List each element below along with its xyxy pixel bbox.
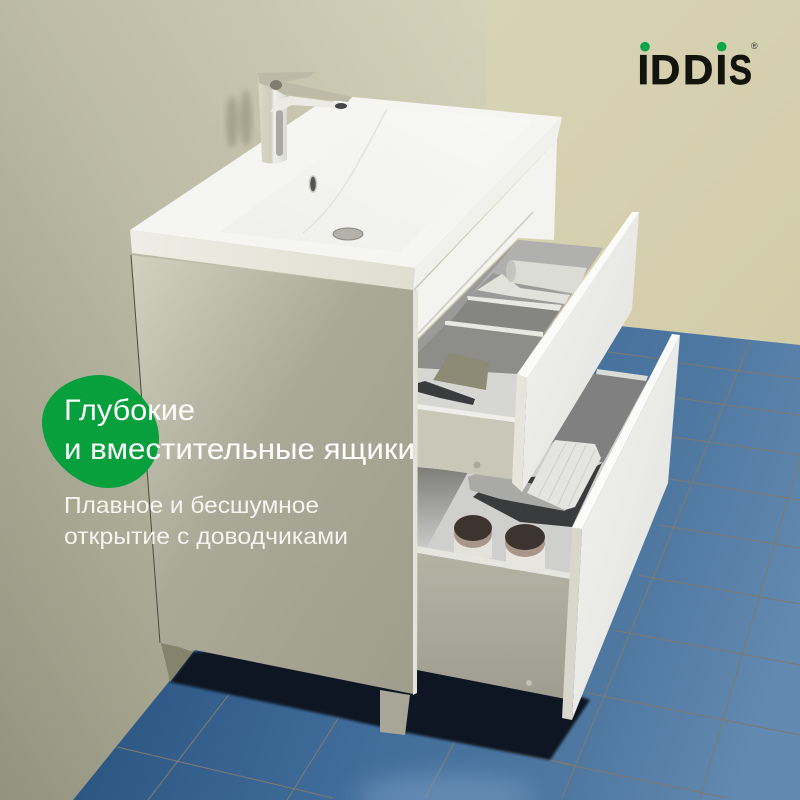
upper drawer: [417, 212, 639, 492]
green blob: [42, 375, 159, 488]
faucet shadow on wall: [226, 90, 252, 148]
divider strip two: [445, 321, 543, 337]
wall return under cabinet: [160, 640, 193, 682]
left wall: [0, 0, 490, 800]
lower drawer base: [417, 373, 648, 579]
cabinet shadow on floor: [170, 640, 590, 760]
white ribbed towel: [527, 440, 601, 510]
floor light patch: [355, 773, 535, 800]
upper drawer rim: [417, 404, 518, 423]
lower drawer top edge: [572, 334, 680, 529]
heading: [64, 394, 415, 466]
logo wordmark: I: [716, 46, 727, 93]
razor handle: [418, 381, 475, 405]
back compartment: [470, 240, 603, 296]
basin top: [130, 97, 562, 268]
overflow hole: [310, 176, 316, 192]
subheading: открытие с доводчиками: [64, 523, 348, 549]
lower drawer rim: [417, 546, 570, 579]
logo wordmark: S: [729, 47, 752, 94]
middle compartment: [450, 300, 559, 333]
heading: и вместительные ящики: [64, 433, 415, 466]
rail strip: [418, 212, 533, 334]
rolled towel: [506, 260, 587, 294]
logo wordmark: [638, 46, 752, 94]
lower drawer grey interior: [515, 373, 648, 490]
upper drawer top edge: [517, 212, 639, 378]
folded paper: [477, 274, 570, 304]
basin front lip: [130, 230, 415, 290]
grey towel: [468, 472, 570, 511]
jar right: [505, 524, 545, 570]
subheading: Плавное и бесшумное: [64, 492, 319, 518]
divider strip one: [467, 296, 562, 311]
rear rim of lower drawer: [596, 369, 648, 381]
heading: Глубокие: [64, 394, 195, 427]
cabinet upper face under basin: [415, 140, 557, 338]
logo wordmark: D: [683, 46, 713, 93]
white towel in drawer: [418, 368, 518, 420]
basin right lip: [413, 117, 562, 290]
lower drawer inner side wall: [417, 467, 468, 547]
lower drawer screw: [526, 680, 532, 686]
aerator: [335, 103, 347, 109]
jar left: [454, 515, 492, 558]
lower drawer front panel: [572, 335, 680, 720]
basin bowl: [220, 109, 533, 252]
cabinet side front edge: [413, 290, 418, 695]
glass bottle: [433, 353, 489, 390]
right wall: [487, 0, 800, 346]
upper drawer base: [418, 240, 603, 374]
lower drawer: [417, 334, 680, 720]
cabinet left edge line: [131, 255, 160, 643]
logo green dots: [640, 42, 726, 52]
drain: [333, 228, 363, 240]
cabinet side panel: [131, 255, 413, 694]
lower drawer side box: [417, 553, 570, 699]
bowl crease: [303, 109, 387, 233]
front compartment: [418, 325, 542, 374]
faucet joint: [270, 80, 282, 90]
faucet spout: [270, 96, 350, 112]
upper drawer side box: [417, 409, 518, 480]
upper drawer front panel: [522, 212, 639, 492]
washbasin: [130, 90, 562, 290]
faucet slot highlight: [276, 110, 283, 156]
logo IDDIS: [638, 41, 758, 94]
logo wordmark: D: [650, 46, 680, 93]
lower drawer left edge: [562, 528, 582, 720]
registered mark: ®: [751, 41, 758, 51]
cabinet leg: [380, 690, 410, 735]
faucet: [258, 72, 352, 164]
faucet lever: [258, 72, 352, 102]
dark towel: [473, 463, 602, 527]
logo wordmark: I: [638, 46, 649, 93]
tiled floor: [73, 325, 800, 800]
upper drawer left edge: [512, 374, 527, 492]
subheading: [64, 492, 348, 549]
faucet body: [258, 75, 287, 164]
upper drawer screw: [474, 462, 480, 468]
